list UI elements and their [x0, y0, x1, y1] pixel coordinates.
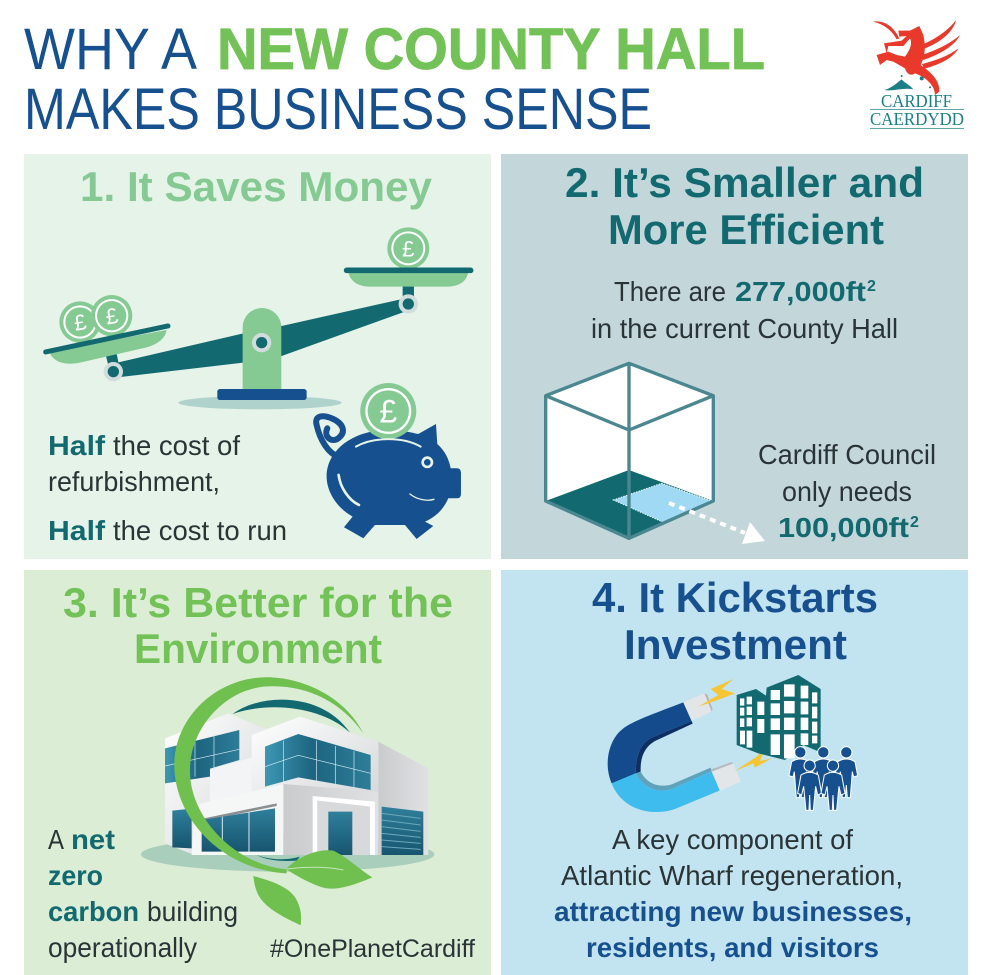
text: net zero carbon: zero [48, 860, 103, 891]
heading 3: 3. It’s Better for the [63, 579, 453, 626]
panel 4: Kickstarts Investment [501, 570, 968, 975]
icon: balance scales: £ [72, 309, 88, 336]
heading 3 [63, 579, 453, 672]
text: current floor area: 277,000ft [735, 276, 866, 307]
icon: piggy bank with coin [316, 383, 461, 539]
title: NEW COUNTY HALL [217, 17, 765, 82]
text: net zero carbon: A [48, 824, 64, 855]
heading 2: 2. It’s Smaller and [565, 159, 924, 206]
heading 4 [592, 574, 878, 668]
text: only needs: Cardiff Council [758, 439, 936, 470]
panel 1: It Saves Money [24, 154, 491, 559]
text: atlantic wharf: Atlantic Wharf regeneration, [561, 860, 903, 891]
text: net zero carbon: carbon [48, 896, 139, 927]
icon: piggy bank with coin: £ [379, 394, 397, 430]
arrow: dotted pointer [669, 503, 765, 544]
icon: balance scales: £ [402, 236, 414, 261]
logo: Cardiff Council dragon [870, 20, 964, 129]
heading 1: 1. It Saves Money [80, 163, 433, 210]
text: half the cost: Half [48, 430, 106, 461]
text: only needs: 100,000ft [778, 512, 909, 543]
title [24, 17, 765, 142]
title: WHY A [24, 17, 197, 82]
text: half the cost: the cost of [113, 430, 240, 461]
heading 3: Environment [134, 625, 382, 672]
text: net zero carbon: operationally [48, 932, 197, 963]
heading 4: 4. It Kickstarts [592, 574, 878, 621]
text: atlantic wharf: attracting new businesses, [554, 896, 912, 927]
text: current floor area: in the current County Hall [591, 313, 898, 344]
text: half the cost [48, 430, 287, 546]
hashtag: #OnePlanetCardiff [270, 935, 475, 963]
text: net zero carbon: net [71, 824, 115, 855]
heading 4: Investment [624, 621, 847, 668]
logo: Cardiff Council dragon: CAERDYDD [870, 109, 964, 129]
text: only needs [758, 439, 936, 543]
heading 2: More Efficient [608, 206, 884, 253]
text: current floor area: There are [614, 276, 726, 307]
text: current floor area: 2 [867, 278, 876, 295]
icon: green building with leaf swoosh [141, 677, 434, 925]
text: only needs: 2 [910, 514, 919, 531]
heading 2 [565, 159, 924, 253]
text: current floor area [591, 276, 898, 344]
text: atlantic wharf: residents, and visitors [586, 932, 879, 963]
panel 3: Better for the Environment [24, 570, 491, 975]
text: only needs: only needs [782, 476, 912, 507]
text: half the cost: Half [48, 515, 106, 546]
icon: cube floor area [546, 363, 713, 538]
text: half the cost: refurbishment, [48, 466, 220, 497]
text: net zero carbon: building [147, 896, 238, 927]
title: MAKES BUSINESS SENSE [24, 77, 652, 142]
icon: balance scales [46, 227, 471, 409]
logo: Cardiff Council dragon: CARDIFF [881, 91, 952, 111]
panel 2: Smaller and More Efficient [501, 154, 968, 559]
text: atlantic wharf: A key component of [612, 824, 853, 855]
icon: magnet attracting buildings and people [608, 675, 858, 812]
text: half the cost: the cost to run [113, 515, 287, 546]
text: net zero carbon [48, 824, 238, 963]
text: atlantic wharf [554, 824, 912, 963]
icon: balance scales: £ [104, 303, 120, 330]
